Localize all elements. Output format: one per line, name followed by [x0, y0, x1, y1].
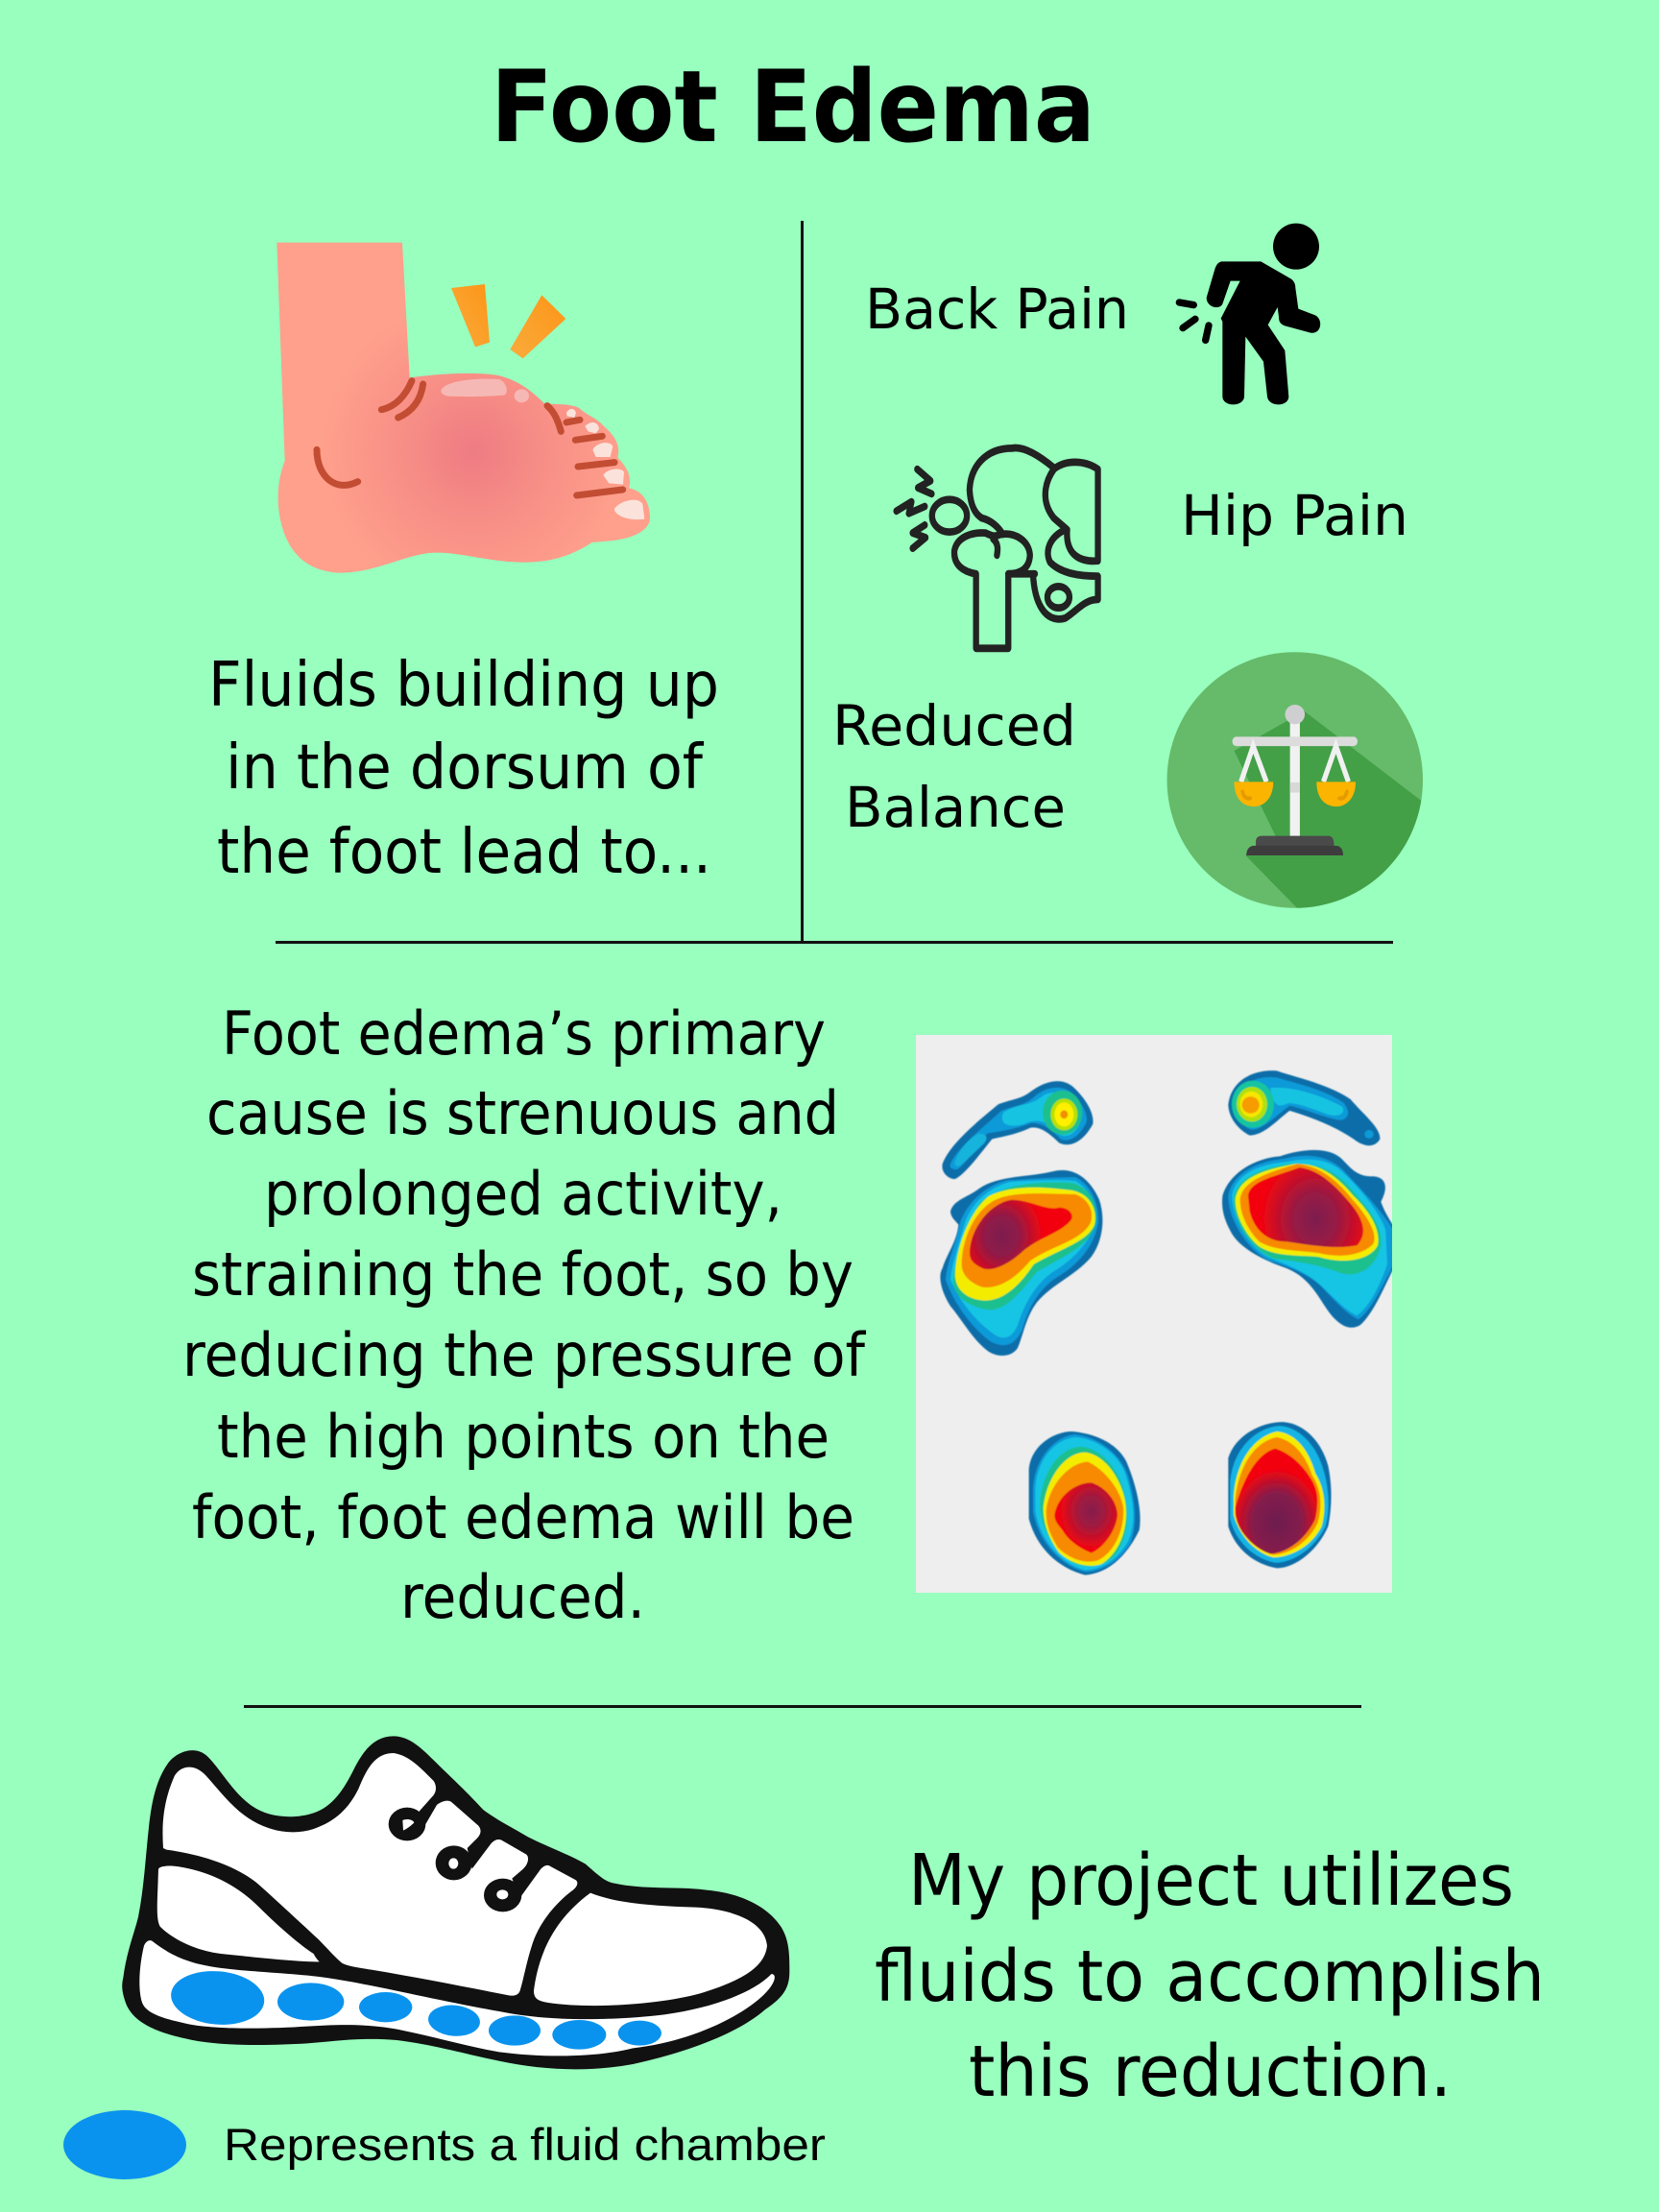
text: project statement: fluids to accomplish	[875, 1936, 1545, 2018]
icon: hip joint	[897, 448, 1098, 648]
legend: fluid chamber	[63, 2110, 826, 2179]
text: fluids build-up	[208, 650, 719, 888]
icon: shoe with fluid chambers	[122, 1736, 789, 2069]
text: primary cause: the high points on the	[217, 1402, 830, 1472]
text: primary cause: reducing the pressure of	[182, 1320, 867, 1390]
fluid chambers	[169, 1967, 661, 2050]
right toes	[1228, 1070, 1380, 1145]
text: primary cause: cause is strenuous and	[206, 1078, 839, 1148]
laces and eyelets	[389, 1808, 521, 1911]
text: project statement	[875, 1839, 1545, 2113]
shoe toe panel	[534, 1893, 767, 2006]
shoe upper	[162, 1753, 577, 1996]
icon: balance scale	[1167, 652, 1426, 914]
text: fluids build-up: in the dorsum of	[226, 733, 704, 804]
left forefoot	[940, 1170, 1102, 1356]
text: project statement: My project utilizes	[908, 1839, 1514, 1922]
divider lines	[244, 221, 1393, 1707]
label: back pain: Back Pain	[865, 276, 1129, 342]
shoe sole	[139, 1940, 775, 2056]
label: hip pain: Hip Pain	[1181, 483, 1408, 548]
right heel	[1228, 1422, 1331, 1568]
text: primary cause: prolonged activity,	[264, 1159, 782, 1229]
shoe heel panel	[157, 1865, 320, 1961]
label: reduced balance: Reduced	[832, 693, 1076, 758]
left heel	[1029, 1431, 1141, 1575]
text: primary cause: reduced.	[400, 1562, 645, 1632]
label: reduced balance	[832, 693, 1076, 840]
text: primary cause: straining the foot, so by	[192, 1239, 854, 1310]
text: fluids build-up: Fluids building up	[208, 650, 719, 721]
icon: person with back pain	[1179, 224, 1320, 404]
shoe outline	[122, 1736, 789, 2069]
text: fluids build-up: the foot lead to...	[217, 817, 711, 888]
legend: fluid chamber: Represents a fluid chamber	[224, 2119, 826, 2170]
icon: swollen foot	[276, 243, 650, 573]
text: primary cause: Foot edema’s primary	[222, 998, 826, 1069]
text: project statement: this reduction.	[969, 2031, 1452, 2113]
chart: foot pressure heat map	[916, 1035, 1395, 1593]
title: Foot Edema	[491, 50, 1095, 165]
text: primary cause	[182, 998, 867, 1632]
right forefoot	[1222, 1150, 1395, 1328]
label: reduced balance: Balance	[845, 775, 1066, 840]
left toes	[942, 1081, 1094, 1179]
text: primary cause: foot, foot edema will be	[192, 1482, 854, 1552]
